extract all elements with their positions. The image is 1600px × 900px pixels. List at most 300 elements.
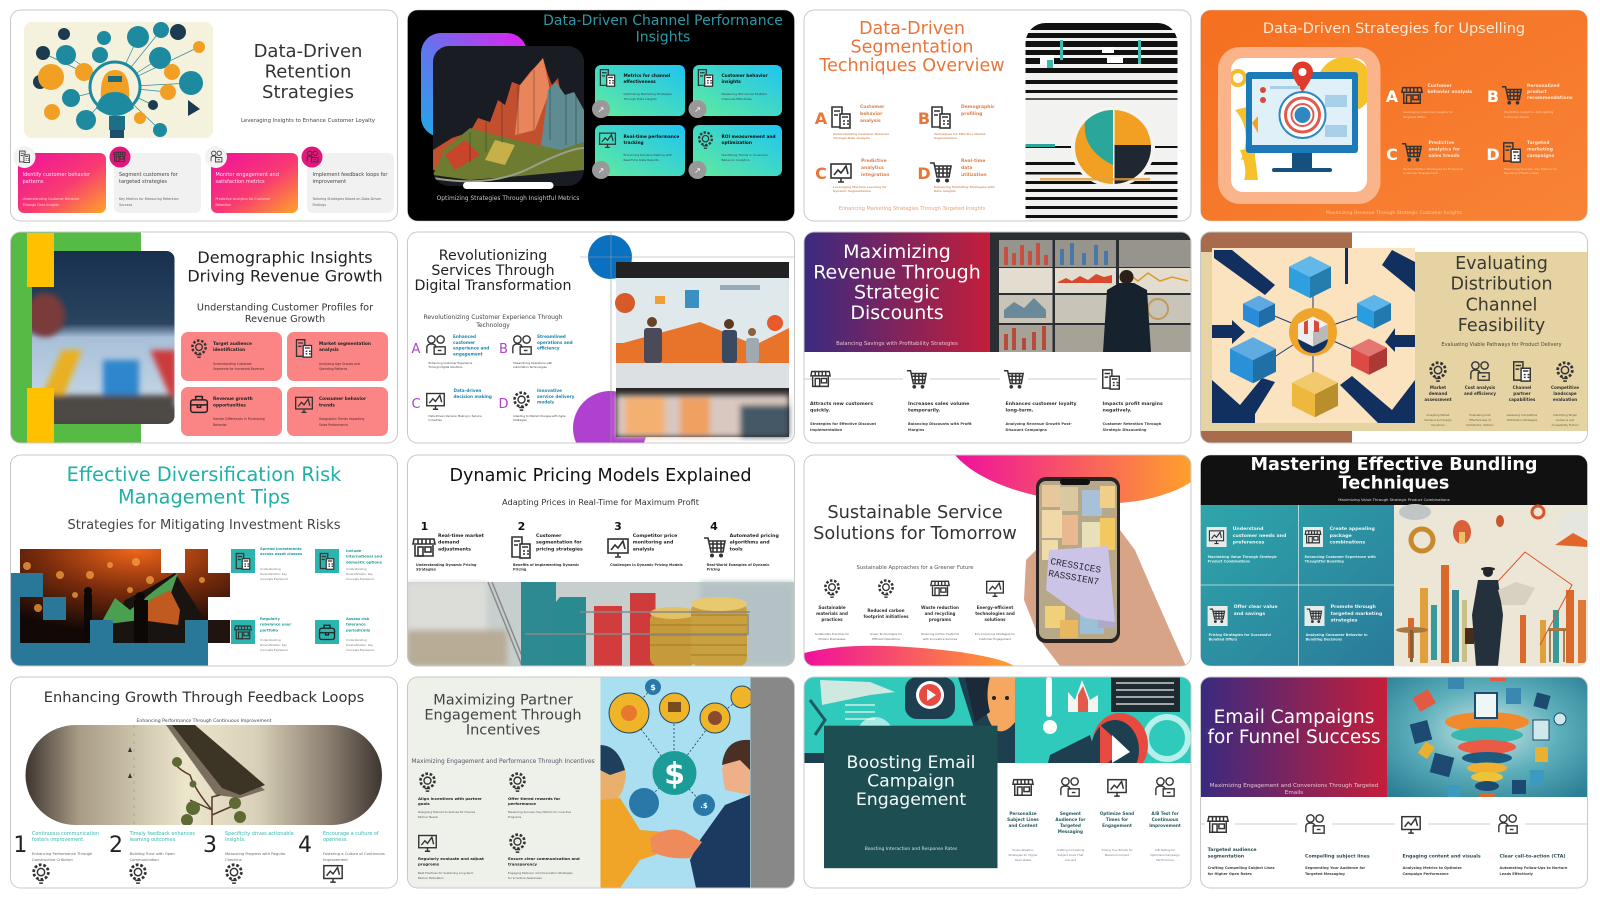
item: risk tolerance: periodically xyxy=(346,628,371,632)
item C xyxy=(815,158,889,193)
image: striped pie chart xyxy=(1025,23,1178,221)
panel: Boosting Email Campaign Engagement xyxy=(803,677,1191,888)
column 3: Timing Your Emails for xyxy=(1100,848,1133,852)
item: materials: Modern Businesses xyxy=(819,637,846,641)
panel: Revolutionizing Services Through Digital Transformation xyxy=(408,232,794,465)
card: feedback loops: Implement feedback loops for xyxy=(312,172,388,178)
item: spread investments: Concepts Explained xyxy=(260,577,288,581)
item: energy: solutions xyxy=(984,617,1006,622)
item: waste: programs xyxy=(929,617,952,622)
factor 3: Channel xyxy=(1513,385,1532,390)
item C: Data-driven xyxy=(454,388,481,393)
item C: C xyxy=(1386,145,1398,164)
column 3: Times for xyxy=(1106,817,1129,822)
item A: engagement xyxy=(453,351,483,356)
item: align incentives: Designing Tailored Incentives for Diverse xyxy=(418,810,475,814)
panel: Maximizing Revenue Through Strategic Discounts xyxy=(804,232,1191,443)
item D: Measuring Success: Key Metrics for xyxy=(1504,167,1558,171)
item: packages: Thoughtful Bundling xyxy=(1305,560,1344,564)
step 3: long-term. xyxy=(1006,408,1034,414)
card: customer patterns xyxy=(14,146,106,213)
item D: D xyxy=(498,397,509,412)
title: Engagement Through xyxy=(424,708,582,724)
factor 3: capabilities xyxy=(1509,397,1536,402)
card: real-time tracking: Enhancing Decision-Making with xyxy=(624,153,672,157)
item: spread investments: Understanding xyxy=(260,567,281,571)
factor 1: Analyzing Market xyxy=(1426,413,1450,417)
title: Techniques Overview xyxy=(818,56,1005,76)
factor 3: partner xyxy=(1513,391,1531,396)
step 1: 1 xyxy=(13,833,27,858)
card: consumer behavior xyxy=(287,387,388,436)
title: Strategic xyxy=(854,282,940,304)
item A: Enhancing Customer Experience xyxy=(428,361,473,365)
step 1: adjustments xyxy=(438,546,471,552)
title: Maximizing Partner xyxy=(433,692,573,708)
column 4: A/B Test for xyxy=(1151,811,1180,816)
item: risk tolerance: Diversification: Key xyxy=(346,643,373,647)
title text: Engagement xyxy=(856,790,966,810)
step 4 xyxy=(704,520,779,572)
step 4 xyxy=(1102,370,1163,432)
item: align incentives: goals xyxy=(418,801,430,806)
item A: Through Data Analysis xyxy=(833,136,870,140)
step 4: 4 xyxy=(298,833,312,858)
item B: Predictive Analytics: Anticipating xyxy=(1504,110,1553,114)
item: international and domestic: Concepts Explained xyxy=(346,577,374,581)
card: revenue growth: Revenue growth xyxy=(213,396,253,402)
item: materials: Sustainable xyxy=(818,605,846,610)
step 4 xyxy=(1499,815,1568,876)
item B: B xyxy=(499,342,508,357)
step 1: Strategies xyxy=(416,568,436,572)
item C: Leveraging Machine Learning for xyxy=(833,185,887,189)
step 3: Analyzing Revenue Growth Post- xyxy=(1006,422,1072,426)
column 1: Strategies for Higher xyxy=(1008,853,1038,857)
item: communication: for Incentive Awareness xyxy=(508,876,542,880)
item B xyxy=(1487,83,1573,119)
step 4: 4 xyxy=(710,520,718,533)
title: Data-Driven Strategies for Upselling xyxy=(1263,21,1525,37)
item: communication: Engaging Partners: Communication Strategies xyxy=(508,871,573,875)
subtitle: Strategies for Mitigating Investment Risks xyxy=(67,518,341,533)
factor 1 xyxy=(1424,363,1452,427)
column 4 xyxy=(1149,778,1181,862)
card: feedback loops: improvement xyxy=(312,179,346,185)
step 2 xyxy=(512,520,583,572)
item D: Upselling Effectiveness xyxy=(1504,171,1539,175)
item B: Demographic xyxy=(961,104,995,110)
decorative blue circle xyxy=(588,235,632,279)
gradient header xyxy=(1200,677,1387,797)
step 4: Encourage a culture of xyxy=(323,831,379,837)
title: Discounts xyxy=(850,302,944,324)
item C: integration xyxy=(861,172,889,178)
step 1: 1 xyxy=(421,520,428,533)
item: materials xyxy=(815,580,850,641)
card: market segmentation: Analyzing Age Groups and xyxy=(319,362,360,366)
item: understand customer: Maximizing Value Through Strategic xyxy=(1208,555,1277,559)
subtitle: Sustainable Approaches for a Greener Future xyxy=(857,565,973,571)
column 3: Maximum Impact xyxy=(1105,853,1130,857)
card: monitor engagement xyxy=(205,146,298,213)
illustration: customer network with magnifier xyxy=(24,22,213,138)
item B: Techniques for Effective Market xyxy=(934,132,986,136)
card: consumer behavior: trends xyxy=(319,402,335,408)
step 2: temporarily. xyxy=(908,408,941,414)
subtitle: Revolutionizing Customer Experience Through xyxy=(423,314,563,321)
step 2: Segmenting Your Audience for xyxy=(1305,866,1365,870)
panel: Data-Driven Strategies for Upselling xyxy=(1200,10,1588,221)
factor 2: Cost analysis xyxy=(1465,385,1496,390)
item: spread investments xyxy=(231,547,303,581)
card: metrics: Through Data Insights xyxy=(622,97,657,101)
column 4: Optimized Campaign xyxy=(1150,853,1180,857)
item: waste xyxy=(921,581,960,641)
card: customer patterns: Understanding Customer Behavior xyxy=(22,197,80,201)
subtitle: Revenue Growth xyxy=(245,314,325,325)
item A: A xyxy=(1386,87,1399,106)
step 4: tools xyxy=(730,546,743,552)
item: align incentives xyxy=(418,774,482,819)
item A: analysis xyxy=(860,118,881,124)
step 4: Impacts profit margins xyxy=(1102,401,1163,407)
panel: Enhancing Growth Through Feedback Loops xyxy=(10,677,398,888)
item B: operations and xyxy=(537,340,573,345)
step 4: algorithms and xyxy=(730,540,770,546)
item: understand customer: Understand xyxy=(1233,526,1263,532)
column 1: and Content xyxy=(1008,823,1038,828)
item: value: Pricing Strategies for Successful xyxy=(1209,633,1271,637)
factor 2: Evaluating Cost xyxy=(1469,413,1491,417)
item A: Leveraging Customer Insights for xyxy=(1403,110,1454,114)
factor 4: Audience and xyxy=(1556,418,1574,422)
title: Techniques xyxy=(1339,474,1449,494)
card: ROI: ↗ xyxy=(694,166,701,175)
step 4: Clear call-to-action (CTA) xyxy=(1500,854,1566,860)
step 1: Crafting Compelling Subject Lines xyxy=(1208,866,1275,870)
factor 3: Assessing Competitive xyxy=(1507,413,1538,417)
column 4: A/B Testing for xyxy=(1155,848,1176,852)
title: Feasibility xyxy=(1458,316,1545,336)
column 1 xyxy=(1007,780,1039,862)
panel: Effective Diversification Risk Management Tips xyxy=(10,455,398,666)
step 1 xyxy=(413,520,485,572)
step 4: openness. xyxy=(323,837,348,843)
image: partners handshake with dollar: .$ xyxy=(700,802,708,810)
card: customer behavior xyxy=(688,65,782,118)
step 3: Challenges in Dynamic Pricing Models xyxy=(610,563,683,567)
image: marketer illustration xyxy=(803,677,1191,780)
panel: Mastering Effective Bundling Techniques xyxy=(1200,455,1593,666)
caption: Optimizing Strategies Through Insightful Metrics xyxy=(437,196,579,202)
footer subtitle: Maximizing Revenue Through Strategic Customer Insights xyxy=(1326,210,1463,216)
factor 3: Distribution Strategies xyxy=(1507,418,1538,422)
item D: Data Insights xyxy=(934,189,956,193)
item: carbon: Efficient Operations xyxy=(872,637,900,641)
item C: Dynamic Segmentation xyxy=(833,189,871,193)
item: international and domestic: Include xyxy=(346,549,362,553)
item: tiered rewards: Programs xyxy=(508,815,522,819)
card: consumer behavior: Sales Performance xyxy=(319,423,348,427)
item: international and domestic: domestic options xyxy=(346,560,383,564)
card: monitor engagement: Monitor engagement and xyxy=(216,172,279,178)
panel: Data-Driven Segmentation Techniques Overview xyxy=(814,20,1178,220)
step 3: 3 xyxy=(614,520,622,533)
card: revenue growth: Behavior xyxy=(213,423,227,427)
item C: Customer Engagement xyxy=(1403,171,1438,175)
item A: Customer xyxy=(1428,83,1453,89)
item: value: Offer clear value xyxy=(1234,604,1278,610)
item: tiered rewards: performance xyxy=(508,801,536,806)
item D: D xyxy=(917,164,931,183)
item C: Industries xyxy=(428,418,442,422)
item: waste: Waste reduction xyxy=(921,605,959,610)
step 1 xyxy=(13,831,99,883)
item: tiered rewards xyxy=(508,774,571,819)
step 3: monitoring and xyxy=(633,540,673,546)
title: Driving Revenue Growth xyxy=(187,266,383,286)
factor 3 xyxy=(1507,362,1538,422)
card: customer patterns: patterns xyxy=(22,179,44,185)
image: monitor with target xyxy=(1231,57,1373,192)
item B: Segmentation xyxy=(934,136,957,140)
card: customer patterns: Identify customer behavior xyxy=(22,172,91,178)
factor 4: evaluation xyxy=(1553,397,1577,402)
item: promote: targeted marketing xyxy=(1331,611,1382,617)
item: materials: materials and xyxy=(816,611,848,616)
card: segment customers: targeted strategies xyxy=(119,179,167,185)
title: Mastering Effective Bundling xyxy=(1251,455,1537,475)
item: promote: Bundling Decisions xyxy=(1306,638,1342,642)
factor 2: Effectiveness of xyxy=(1469,418,1491,422)
card: target audience: Segments for Increased Revenue xyxy=(213,367,264,371)
item D: Real-time xyxy=(961,158,985,164)
item: evaluate: Partner Motivation xyxy=(418,876,444,880)
factor 1: Market xyxy=(1430,385,1446,390)
title: Enhancing Growth Through Feedback Loops xyxy=(44,689,364,706)
card: customer behavior: insights xyxy=(722,79,741,85)
item C: Data-Driven Decision Making in Service xyxy=(428,414,482,418)
item: packages: package xyxy=(1330,533,1352,539)
card: revenue growth: opportunities xyxy=(213,402,246,408)
column 1: Open Rates xyxy=(1015,858,1032,862)
item A: A xyxy=(412,342,421,357)
step 2: segmentation for xyxy=(536,540,582,546)
item: promote: Promote through xyxy=(1331,604,1376,610)
card: consumer behavior: Geographic Trends Impacting xyxy=(319,417,364,421)
item D: utilization xyxy=(961,172,987,178)
step 2: Communication xyxy=(130,858,159,862)
column 4: Performance xyxy=(1156,858,1174,862)
card: ROI: optimization xyxy=(722,140,752,146)
factor 1: demand xyxy=(1429,391,1447,396)
item A: customer xyxy=(453,340,476,345)
item B: profiling xyxy=(961,111,982,117)
item: materials: Sustainable Practices for xyxy=(815,632,850,636)
item D: data xyxy=(961,165,972,171)
item: rebalance: Diversification: Key xyxy=(260,643,287,647)
sticky note with handwriting: RASSSIEN7 xyxy=(1047,568,1100,588)
item: energy xyxy=(975,581,1016,641)
item: tiered rewards: Measuring Success: Key Metrics for Incentive xyxy=(508,810,571,814)
title: Data-Driven xyxy=(254,41,362,62)
step 3: Competitor price xyxy=(633,533,677,539)
item: risk tolerance: Understanding xyxy=(346,638,367,642)
card: customer behavior: Customer behavior xyxy=(722,73,768,79)
step 2: Targeted Messaging xyxy=(1305,872,1345,876)
title: for Funnel Success xyxy=(1208,727,1380,748)
card: consumer behavior: Consumer behavior xyxy=(319,396,367,402)
step 2: 2 xyxy=(109,833,123,858)
card: real-time tracking xyxy=(592,125,685,179)
panel: Maximizing Partner Engagement Through Incentives xyxy=(408,677,794,888)
step 2: Balancing Discounts with Profit xyxy=(908,422,972,426)
title: Email Campaigns xyxy=(1214,707,1374,728)
step 4: Strategic Discounting xyxy=(1102,428,1147,432)
item C: analytics xyxy=(861,165,884,171)
step 1: Understanding Dynamic Pricing xyxy=(416,563,477,567)
image: man facing dashboards xyxy=(990,232,1191,352)
title: Dynamic Pricing Models Explained xyxy=(449,466,752,486)
panel: Email Campaigns for Funnel Success xyxy=(1200,677,1588,888)
item A xyxy=(412,334,489,369)
title text: Boosting Email xyxy=(847,753,975,773)
item B: B xyxy=(1487,87,1499,106)
image: 3D mountain data chart xyxy=(433,46,584,186)
image frame xyxy=(1218,47,1380,204)
step 3: Engaging content and visuals xyxy=(1402,854,1481,860)
step 2: Customer xyxy=(536,533,562,539)
item: international and domestic xyxy=(315,549,383,581)
column 4: Continuous xyxy=(1152,817,1179,822)
item: rebalance: rebalance your xyxy=(260,623,291,627)
step 3: Analyzing Metrics to Optimize xyxy=(1402,866,1462,870)
title: Incentives xyxy=(466,722,540,738)
yellow accent bottom xyxy=(27,388,54,443)
image: blurred chart xyxy=(25,251,176,425)
step 3: 3 xyxy=(203,833,217,858)
item A: behavior xyxy=(860,111,883,117)
white pill xyxy=(463,182,554,189)
item A xyxy=(815,104,890,140)
card: market segmentation xyxy=(287,332,388,381)
step 1: Attracts new customers xyxy=(810,401,873,407)
title: Solutions for Tomorrow xyxy=(813,523,1017,544)
card: target audience: Understanding Customer xyxy=(213,362,253,366)
item D: D xyxy=(1486,145,1500,164)
item B: efficiency xyxy=(537,346,560,351)
item: evaluate xyxy=(418,836,484,880)
step 3 xyxy=(1402,817,1481,876)
title: Evaluating xyxy=(1455,254,1548,274)
item: promote: strategies xyxy=(1331,618,1358,624)
item: international and domestic: international and xyxy=(346,555,382,559)
step 1: fosters improvement. xyxy=(32,837,85,843)
item D xyxy=(498,388,575,422)
step 4: Fostering a Culture of Continuous xyxy=(323,852,385,856)
step 1: Strategies for Effective Discount xyxy=(810,422,876,426)
factor 2: Distribution Options xyxy=(1467,423,1494,427)
subtitle: Maximizing Engagement and Performance Through Incentives xyxy=(411,759,595,765)
item C: Personalization Strategies for Enhanced xyxy=(1403,167,1463,171)
image: glowing chart silhouettes xyxy=(20,549,230,643)
item B: recommendations xyxy=(1527,95,1573,101)
step 3: Enhances customer loyalty xyxy=(1006,401,1077,407)
item A: Enhanced xyxy=(453,334,476,339)
item C: decision making xyxy=(454,394,492,399)
item: packages: Create appealing xyxy=(1330,526,1375,532)
factor 2: and efficiency xyxy=(1464,391,1496,396)
item: risk tolerance: Concepts Explained xyxy=(346,648,374,652)
title: Channel xyxy=(1466,295,1537,315)
card: customer behavior: Channels Effectively xyxy=(722,97,752,101)
item: spread investments: Spread investments xyxy=(260,547,303,551)
column 2: Audience for xyxy=(1055,817,1086,822)
step 1: segmentation xyxy=(1208,854,1244,860)
item D: marketing xyxy=(1527,146,1553,152)
card: customer behavior: ↗ xyxy=(694,105,701,114)
title: Digital Transformation xyxy=(415,278,571,294)
step 4: Improvement xyxy=(323,858,348,862)
subtitle: Technology xyxy=(475,322,510,329)
item C: C xyxy=(815,164,827,183)
step 2 xyxy=(907,371,972,432)
item A xyxy=(1386,83,1472,119)
card: metrics: ↗ xyxy=(598,105,604,114)
step 2: Compelling subject lines xyxy=(1305,854,1370,860)
tan background band xyxy=(1200,252,1588,431)
title: Revenue Through xyxy=(813,261,981,283)
item: understand customer: Product Combinations xyxy=(1208,560,1250,564)
item B xyxy=(499,334,573,369)
item B: Streamlined xyxy=(537,334,566,339)
card: real-time tracking: tracking xyxy=(624,140,644,146)
item C: sales trends xyxy=(1428,153,1460,159)
image: partners handshake with dollar xyxy=(600,677,753,888)
factor 4: Accessibility Factors xyxy=(1551,423,1579,427)
item: energy: Eco-Conscious Strategies for xyxy=(975,632,1016,636)
bottom gradient arc xyxy=(804,646,1014,666)
item: align incentives: Partner Needs xyxy=(418,815,438,819)
step 4 xyxy=(298,831,385,882)
title text: Campaign xyxy=(867,772,955,792)
item: understand customer: preferences xyxy=(1233,540,1264,546)
subtitle: Maximizing Engagement and Conversions Through Targeted xyxy=(1210,783,1379,789)
column 2: Messaging xyxy=(1058,829,1083,834)
column 2: Convert xyxy=(1065,858,1077,862)
step 3 xyxy=(203,831,294,883)
step 4: Automating Follow-Ups to Nurture xyxy=(1500,866,1568,870)
subtitle: Leveraging Insights to Enhance Customer Loyalty xyxy=(241,118,376,124)
step 3 xyxy=(608,520,683,567)
card: ROI: ROI measurement and xyxy=(722,134,776,140)
item: rebalance: portfolio xyxy=(260,628,278,632)
subtitle: Understanding Customer Profiles for xyxy=(197,302,373,314)
item D: service delivery xyxy=(537,394,575,399)
sticky note with handwriting: CRESSICES xyxy=(1049,556,1102,576)
step 2 xyxy=(109,831,195,883)
step 2: Pricing xyxy=(513,568,527,572)
item C: analytics for xyxy=(1428,146,1461,152)
item: packages xyxy=(1303,526,1376,564)
item: value: Bundled Offers xyxy=(1209,638,1237,642)
image: cart with bars and coins xyxy=(407,582,795,666)
step 2: Increases sales volume xyxy=(908,401,969,407)
step 1 xyxy=(1208,817,1275,876)
item: waste: and recycling xyxy=(924,611,956,616)
item: packages: Enhancing Customer Experience with xyxy=(1305,555,1376,559)
